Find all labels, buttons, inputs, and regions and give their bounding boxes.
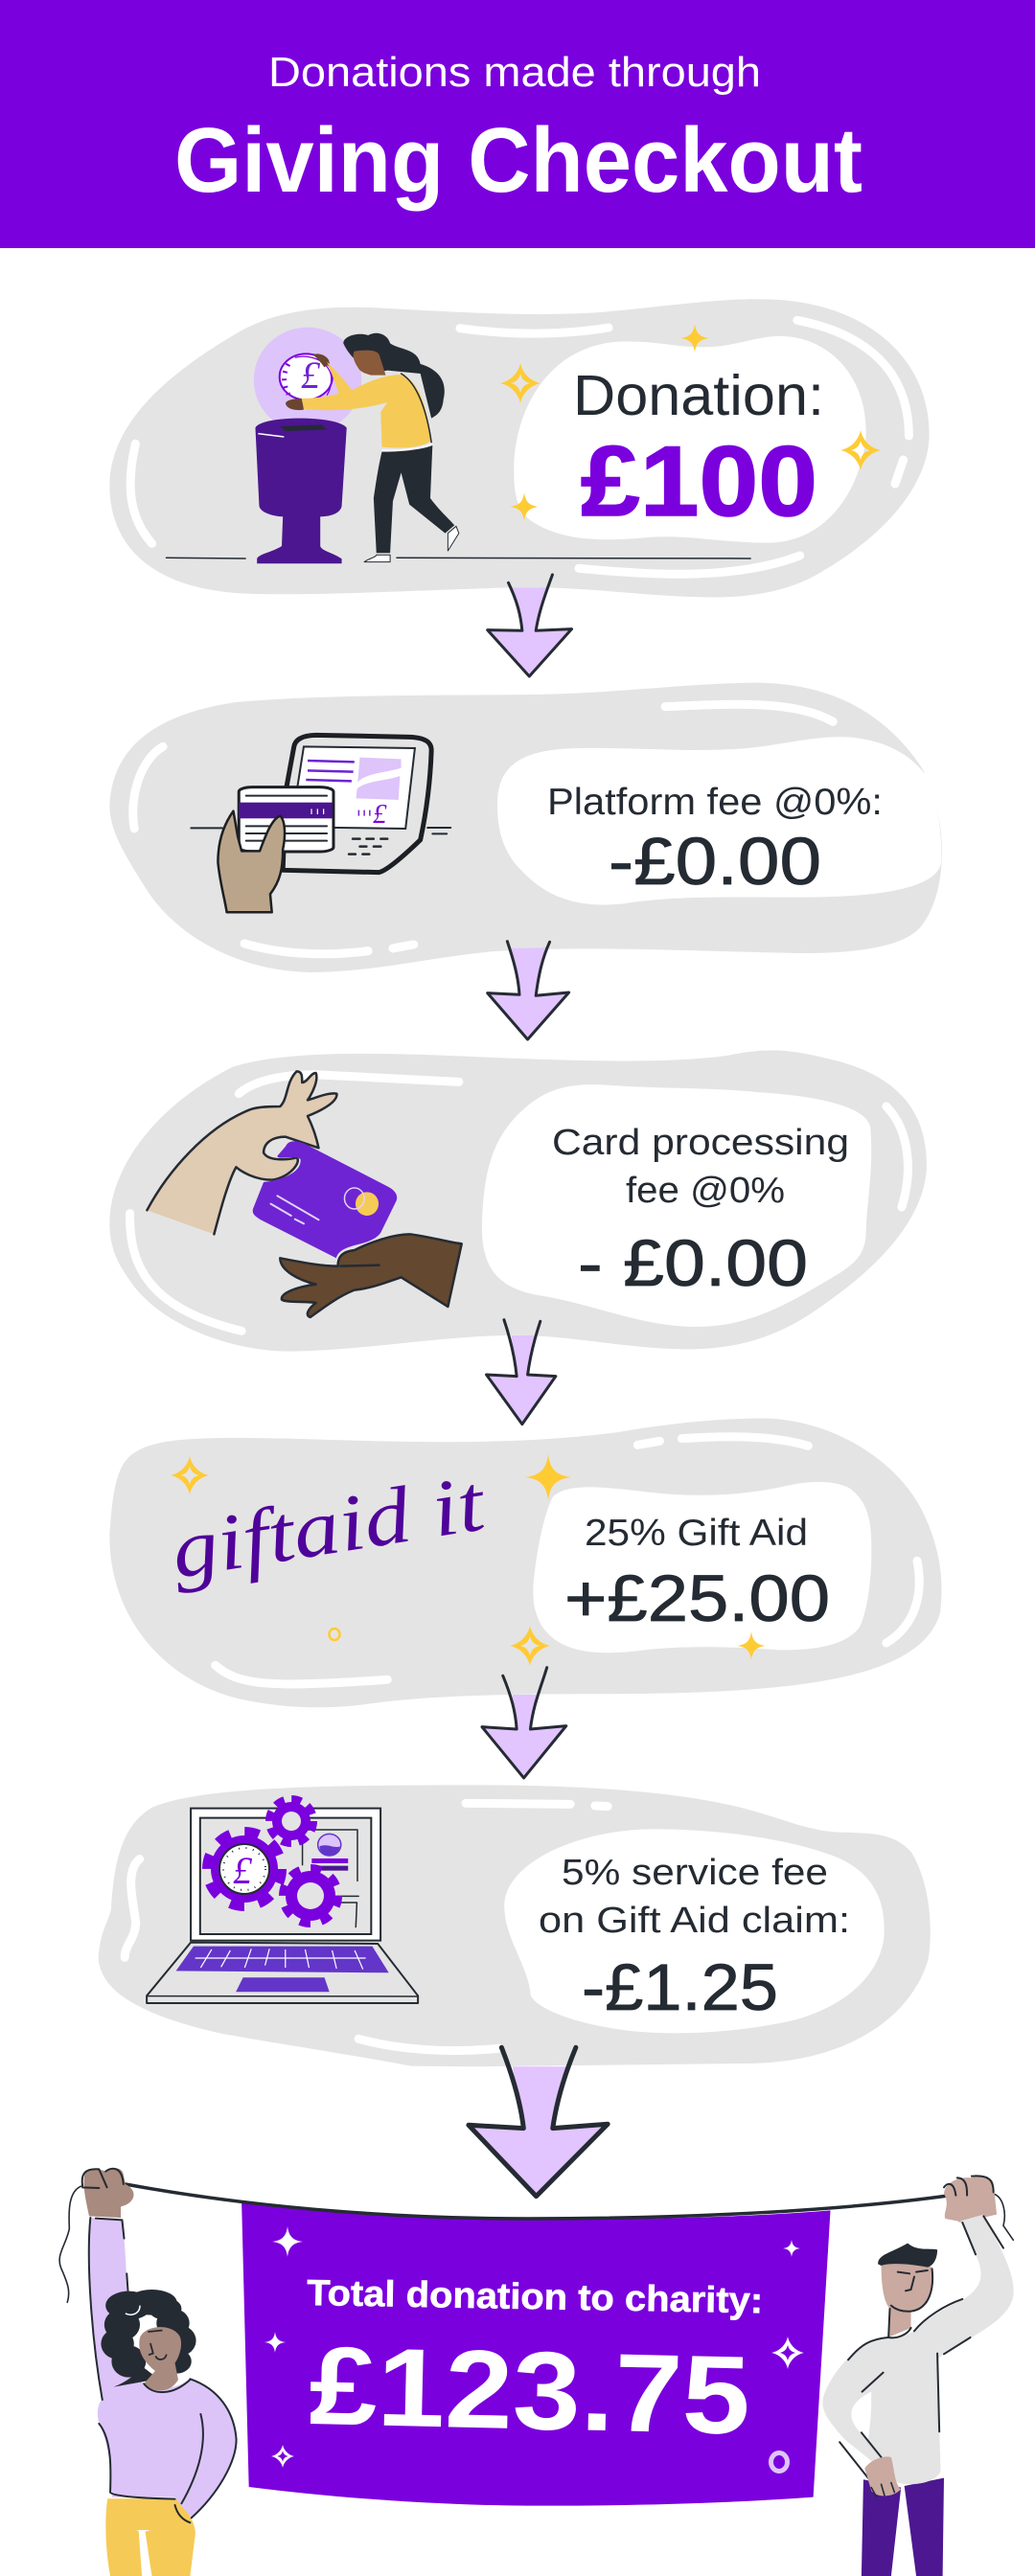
banner bbox=[242, 2201, 831, 2506]
panel: gift aid bbox=[109, 1419, 942, 1707]
panel: donation bbox=[109, 299, 930, 598]
blob background bbox=[109, 1419, 942, 1707]
donation amount: £100 bbox=[581, 426, 817, 537]
text bubble bbox=[533, 1482, 871, 1653]
person right bbox=[822, 2176, 1014, 2576]
total amount: £123.75 bbox=[308, 2323, 751, 2457]
sparkles on banner bbox=[264, 2226, 804, 2472]
illustration: woman donating a coin bbox=[166, 328, 750, 563]
panel: card processing fee bbox=[109, 1050, 927, 1352]
pound on gear: £ bbox=[233, 1849, 253, 1892]
service fee amount: -£1.25 bbox=[582, 1950, 778, 2024]
text bubble bbox=[497, 737, 941, 904]
arrow 1 bbox=[488, 575, 572, 676]
arrow 4 bbox=[482, 1668, 566, 1778]
panel: platform fee bbox=[109, 683, 942, 972]
blob background bbox=[109, 1050, 927, 1352]
arrow 2 bbox=[488, 942, 569, 1039]
text bubble bbox=[482, 1084, 871, 1327]
subtitle: Donations made through bbox=[268, 49, 761, 96]
blob background bbox=[109, 299, 930, 598]
panel: service fee: on Gift Aid claim: bbox=[539, 1901, 850, 1941]
pound on terminal: £ bbox=[373, 799, 387, 830]
arrow 3 bbox=[487, 1320, 556, 1425]
panel: total banner with two people bbox=[59, 2168, 1014, 2576]
total label: Total donation to charity: bbox=[307, 2273, 764, 2321]
platform fee label: Platform fee @0%: bbox=[547, 782, 883, 823]
text bubble bbox=[504, 1829, 885, 2033]
blob background bbox=[99, 1785, 931, 2066]
panel: card processing fee: fee @0% bbox=[626, 1171, 785, 1211]
card fee label: Card processing bbox=[552, 1123, 849, 1163]
person left bbox=[59, 2168, 237, 2576]
rope bbox=[126, 2184, 951, 2219]
title: Giving Checkout bbox=[174, 109, 862, 212]
blob background bbox=[109, 683, 942, 972]
header banner bbox=[0, 0, 1035, 248]
card fee amount: - £0.00 bbox=[578, 1226, 808, 1300]
sparkles bbox=[500, 324, 881, 521]
donation label: Donation: bbox=[573, 364, 824, 427]
illustration: laptop with gears bbox=[147, 1801, 418, 2003]
service fee label: 5% service fee bbox=[562, 1853, 828, 1893]
arrow 5 bbox=[469, 2047, 608, 2197]
illustration: card terminal bbox=[191, 735, 450, 912]
platform fee amount: -£0.00 bbox=[609, 824, 821, 899]
gift aid logo: giftaid it bbox=[165, 1458, 493, 1596]
gift aid amount: +£25.00 bbox=[564, 1562, 830, 1635]
panel: service fee bbox=[99, 1785, 931, 2066]
illustration: hands passing a card bbox=[147, 1071, 462, 1317]
gift aid label: 25% Gift Aid bbox=[585, 1513, 808, 1554]
pound on coin: £ bbox=[301, 353, 321, 397]
text bubble bbox=[514, 336, 866, 543]
sparkles bbox=[171, 1454, 766, 1666]
